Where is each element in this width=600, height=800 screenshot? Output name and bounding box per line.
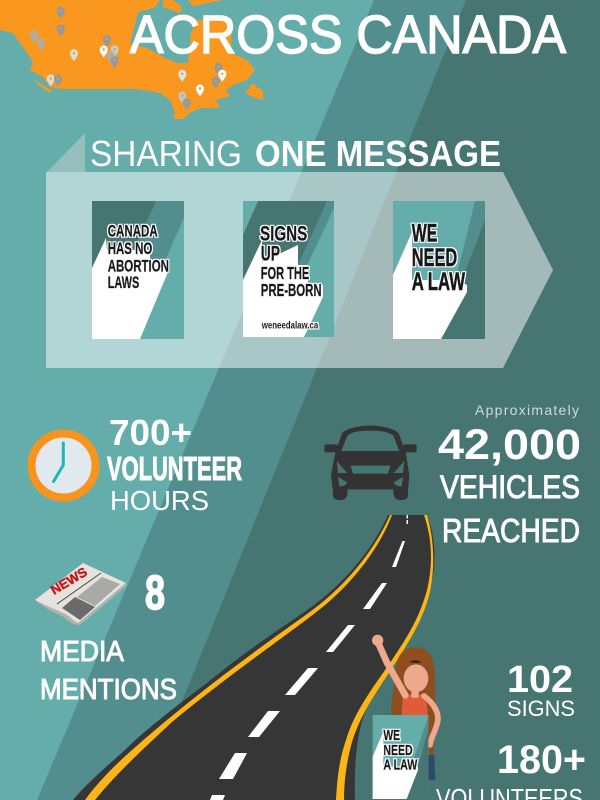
sign: signs up for the pre-born: SIGNS — [260, 222, 307, 246]
stat: volunteers — [436, 738, 586, 800]
sign: signs up for the pre-born: PRE-BORN — [261, 280, 322, 300]
road edge line: left — [85, 515, 392, 800]
icon: clock — [32, 434, 96, 498]
stat: media mentions — [40, 567, 177, 706]
sign: signs up for the pre-born: UP — [261, 242, 280, 266]
sign held by woman: A LAW — [383, 756, 418, 773]
stat: volunteer hours: VOLUNTEER — [107, 450, 242, 487]
stat: media mentions: MENTIONS — [40, 674, 177, 706]
sign held by woman: NEED — [383, 742, 413, 759]
sign: Canada has no abortion laws: HAS NO — [108, 239, 152, 258]
road centre dashes — [210, 515, 408, 800]
sign: signs up for the pre-born: weneedalaw.ca — [261, 321, 319, 332]
stat: volunteers: 180+ — [497, 738, 586, 782]
road — [73, 515, 434, 800]
title: ACROSS CANADA — [130, 5, 566, 65]
sign: we need a law: NEED — [412, 244, 457, 272]
sign: Canada has no abortion laws: LAWS — [108, 273, 139, 292]
sign: we need a law — [393, 201, 485, 339]
stat: media mentions: MEDIA — [40, 636, 125, 668]
sign held by woman — [373, 715, 428, 799]
stat: signs — [507, 659, 575, 721]
stat: vehicles reached: REACHED — [442, 512, 580, 549]
road edge line: right — [336, 515, 433, 800]
sign: Canada has no abortion laws — [92, 201, 184, 339]
sign held by woman: WE — [383, 727, 400, 744]
stat: vehicles reached: 42,000 — [438, 421, 581, 469]
stat: vehicles reached — [438, 402, 581, 549]
sign: signs up for the pre-born — [243, 201, 334, 337]
sign: signs up for the pre-born: FOR THE — [261, 263, 309, 283]
sign: we need a law: A LAW — [412, 268, 465, 296]
woman holding sign — [372, 635, 438, 799]
sign: Canada has no abortion laws: CANADA — [108, 222, 158, 241]
icon: newspaper — [35, 563, 127, 625]
stat: vehicles reached: VEHICLES — [440, 469, 580, 505]
stat: volunteer hours: HOURS — [110, 485, 209, 516]
stat: volunteer hours: 700+ — [109, 412, 192, 453]
heading: sharing one message: ONE MESSAGE — [255, 133, 501, 174]
heading: sharing one message: SHARING — [90, 133, 242, 174]
map of Canada — [0, 0, 263, 119]
map pins — [30, 6, 226, 110]
icon: car — [324, 426, 417, 500]
icon: newspaper: NEWS — [48, 564, 90, 598]
stat: signs: SIGNS — [507, 696, 575, 721]
arrow banner — [46, 133, 553, 368]
heading: sharing one message — [90, 133, 501, 174]
stat: volunteer hours — [107, 412, 242, 516]
sign: we need a law: WE — [412, 220, 437, 248]
stat: signs: 102 — [507, 659, 573, 701]
stat: vehicles reached: Approximately — [475, 402, 579, 418]
sign: Canada has no abortion laws: ABORTION — [108, 257, 169, 276]
stat: media mentions: 8 — [145, 567, 165, 620]
